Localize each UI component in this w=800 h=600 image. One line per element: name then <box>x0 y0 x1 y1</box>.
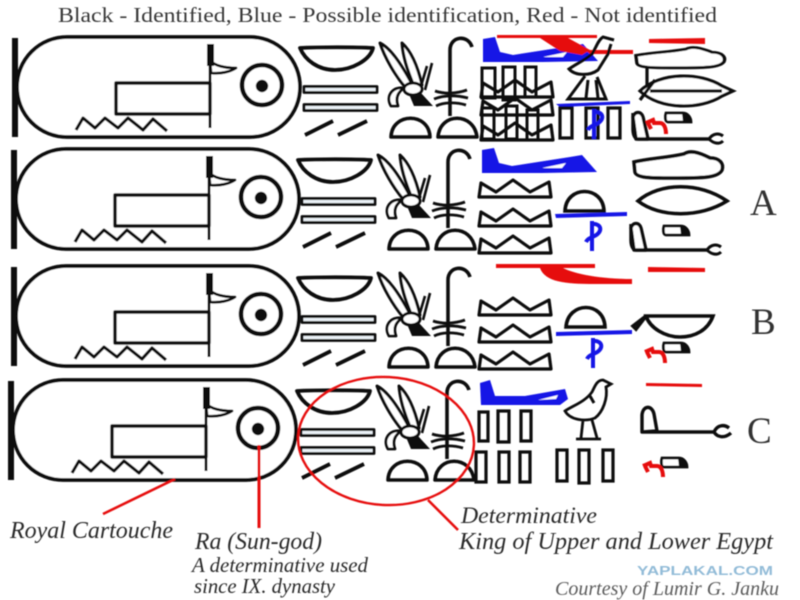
row 4 red hook <box>643 463 663 477</box>
caption: Ra: since IX. dynasty <box>194 574 336 598</box>
row 2 blue plough sign <box>482 148 597 173</box>
row 3 bread sign <box>566 308 605 327</box>
label A: A <box>750 183 777 224</box>
row 1 boat <box>636 47 724 68</box>
row 2 crowns <box>479 180 551 253</box>
row 1 blue line <box>556 101 630 107</box>
row 2 bread sign <box>565 192 604 211</box>
row 3 red hook <box>645 349 665 363</box>
row 2 blue line <box>555 212 627 218</box>
row 1 small blob <box>665 113 691 122</box>
row 3 red line <box>648 267 705 272</box>
row 3: variant B <box>11 264 713 369</box>
row 1 cartouche <box>12 37 300 137</box>
row 1 red wedge sign <box>497 35 633 55</box>
caption: determinative <box>458 503 774 555</box>
row 3 cartouche <box>11 266 299 366</box>
row 3 small blob <box>663 343 689 352</box>
caption: Ra: Ra (Sun-god) <box>194 529 322 555</box>
row 1: composite inscription <box>12 35 733 143</box>
row 2 phonetic sign <box>631 224 721 254</box>
caption: Ra: A determinative used <box>190 553 368 577</box>
caption: determinative: King of Upper and Lower Egypt <box>458 529 774 555</box>
row 2 small blob <box>663 226 689 235</box>
row 1 blue plough sign <box>483 37 598 62</box>
row 1 three strokes <box>560 108 620 138</box>
row 1 red line <box>649 38 705 44</box>
caption: Royal Cartouche: Royal Cartouche <box>9 518 173 544</box>
row 2 boat <box>634 152 722 178</box>
row 2 shared signs <box>298 150 475 249</box>
row 3 blue line <box>556 330 632 336</box>
caption: Ra <box>190 529 368 598</box>
row 4 blue plough sign <box>480 380 568 405</box>
arrow: royal cartouche leader <box>103 479 175 514</box>
callout: determinative ring <box>295 372 477 510</box>
row 2 oval sign <box>638 187 727 214</box>
row 2 blue sign <box>586 221 600 251</box>
row 4 small blob <box>661 458 687 467</box>
row 4 phonetic sign <box>642 407 731 437</box>
row 1 oval sign <box>640 68 733 106</box>
row 3 red wedge sign <box>496 264 632 284</box>
row 1 phonetic sign <box>633 112 723 143</box>
credit: Courtesy of Lumir G. Janku <box>555 578 779 600</box>
row 1 shared signs <box>300 38 477 137</box>
row 4 strokes <box>476 411 531 482</box>
row 4: variant C <box>8 380 731 483</box>
watermark: YAPLAKAL.COM <box>637 563 773 578</box>
row 2: variant A <box>11 148 727 254</box>
caption: determinative: Determinative <box>460 503 597 528</box>
label B: B <box>751 302 776 343</box>
row 4 red line <box>646 383 702 387</box>
row 2 cartouche <box>11 149 299 249</box>
row 3 shared signs <box>298 268 475 367</box>
row 3 blue sign <box>587 338 601 368</box>
arrow: Ra leader <box>258 445 260 528</box>
row 1 bird <box>568 37 614 99</box>
row 4 bird <box>565 380 611 439</box>
row 1 overlapping crowns and strokes <box>481 67 553 140</box>
row 4 cartouche <box>8 380 296 480</box>
title: colour legend: Black - Identified, Blue - Possible identification, Red - Not identified <box>58 3 717 27</box>
row 4 three strokes <box>557 450 613 483</box>
row 3 crowns <box>479 298 551 369</box>
row 1 blue sign <box>588 109 602 139</box>
row 4 shared signs <box>297 381 474 480</box>
row 3 bowl sign <box>633 316 713 337</box>
label C: C <box>747 411 772 452</box>
arrow: determinative leader <box>428 500 458 530</box>
row 1 red hook <box>646 120 666 134</box>
